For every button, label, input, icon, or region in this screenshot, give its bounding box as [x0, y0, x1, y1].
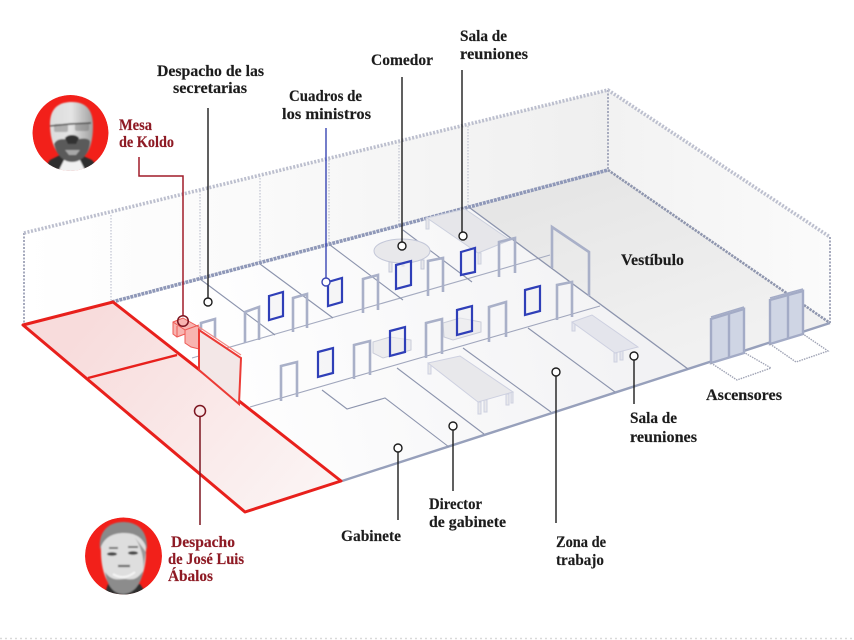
label: Director de gabinete: Director [429, 496, 482, 513]
label: Despacho de las secretarias: secretarias [173, 80, 247, 97]
red partition wall [199, 327, 241, 404]
leader: Despacho de José Luis Ábalos [194, 406, 206, 525]
label: Sala de reuniones top: reuniones [460, 46, 528, 63]
label: Mesa de Koldo: de Koldo [119, 134, 174, 151]
label: Zona de trabajo: trabajo [556, 552, 604, 569]
leader: Despacho de las secretarias [204, 108, 212, 306]
desks [373, 318, 481, 358]
portrait: Ábalos [85, 518, 162, 596]
label: Despacho de José Luis Ábalos: Despacho [171, 534, 235, 551]
label: Director de gabinete: de gabinete [429, 514, 506, 531]
leader: Comedor [398, 77, 406, 250]
label: Mesa de Koldo: Mesa [119, 117, 152, 134]
label: Despacho de José Luis Ábalos: Ábalos [168, 568, 213, 585]
label: Ascensores: Ascensores [706, 387, 782, 404]
minister paintings [269, 248, 540, 377]
red zone: Ábalos office [23, 302, 341, 512]
room walls and floor shell [24, 90, 830, 481]
doors [201, 227, 589, 401]
dining table [374, 239, 430, 272]
leader: Mesa de Koldo [139, 157, 188, 326]
interior partition lines [192, 208, 688, 447]
label: Vestíbulo: Vestíbulo [621, 252, 684, 269]
portrait: Koldo [32, 95, 108, 172]
right meeting table [572, 315, 638, 362]
leader: Gabinete [394, 444, 402, 520]
label: Despacho de José Luis Ábalos: de José Luis [168, 551, 244, 568]
elevators [711, 289, 828, 380]
leader: Sala de reuniones right [630, 352, 638, 404]
leader: Zona de trabajo [552, 368, 560, 523]
label: Cuadros de los ministros: los ministros [282, 106, 371, 123]
leader: Cuadros de los ministros [322, 128, 330, 286]
back meeting table [426, 209, 510, 264]
leader: Director de gabinete [449, 422, 457, 491]
label: Sala de reuniones top: Sala de [460, 28, 507, 45]
label: Gabinete: Gabinete [341, 528, 401, 545]
label: Zona de trabajo: Zona de [556, 534, 606, 551]
label: Comedor: Comedor [371, 52, 433, 69]
label: Cuadros de los ministros: Cuadros de [289, 88, 362, 105]
label: Sala de reuniones right: Sala de [630, 410, 677, 427]
label: Sala de reuniones right: reuniones [630, 429, 697, 446]
front meeting table [428, 356, 513, 414]
Koldo desk [173, 318, 199, 349]
leader: Sala de reuniones top [459, 70, 467, 240]
bottom dotted rule [0, 638, 854, 640]
label: Despacho de las secretarias: Despacho de las [157, 63, 264, 80]
